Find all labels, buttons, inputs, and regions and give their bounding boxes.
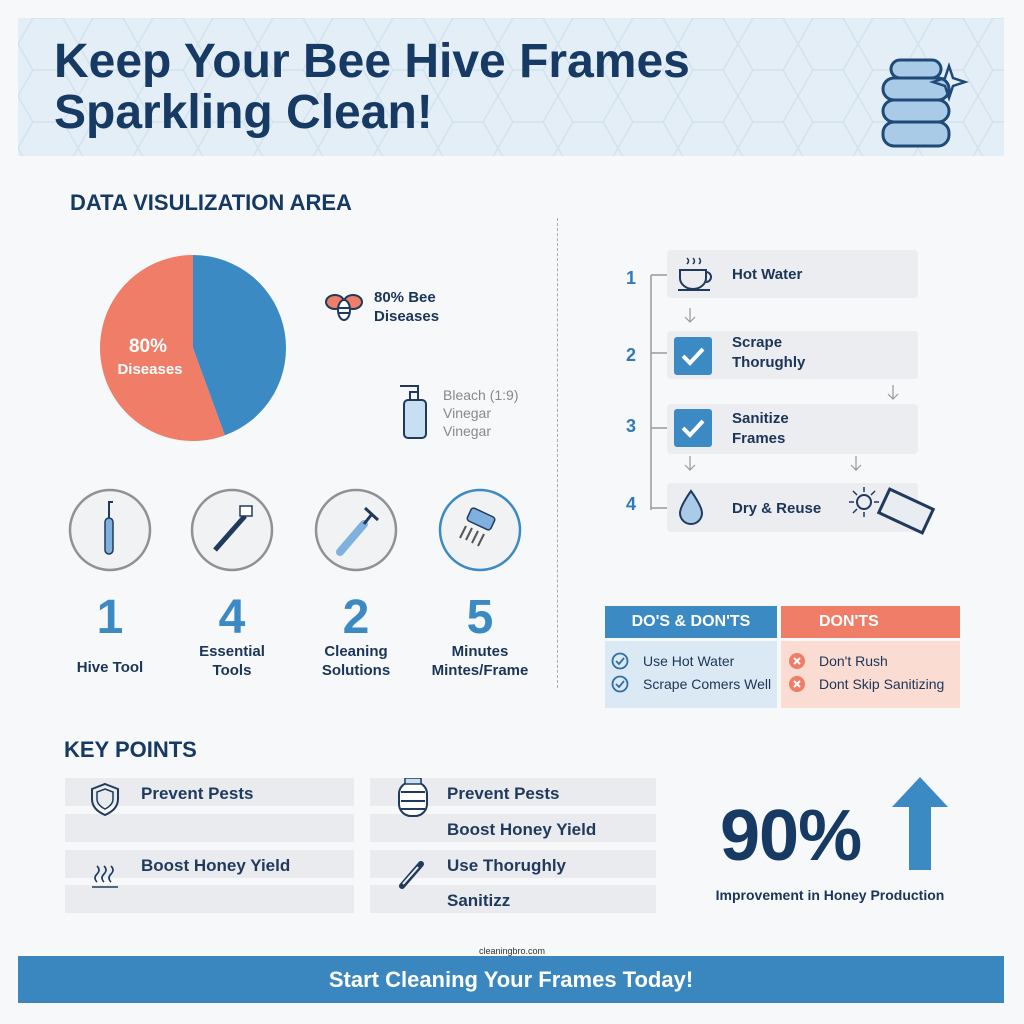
legend: bee diseases: 80% Bee [374, 289, 436, 306]
key points list [65, 778, 656, 913]
process steps: 3 [626, 416, 636, 436]
title [54, 35, 690, 139]
stat icons row: Tools [213, 662, 251, 679]
key points list: Boost Honey Yield [141, 856, 290, 875]
stat icons row: Mintes/Frame [432, 662, 528, 679]
process steps: 4 [626, 494, 636, 514]
header banner [18, 18, 1004, 156]
legend: solutions [400, 385, 518, 439]
stat icons row: Cleaning [324, 643, 388, 660]
key points list: Prevent Pests [141, 784, 253, 803]
icon: hive [882, 58, 969, 148]
stat icons row: 4 [219, 591, 245, 644]
stat: 90% improvement [716, 777, 948, 903]
footer call to action bar: Start Cleaning Your Frames Today! [329, 967, 693, 992]
key points heading: KEY POINTS [64, 737, 197, 762]
stat icons row: 2 [343, 591, 369, 644]
stat: 90% improvement: 90% [720, 796, 861, 876]
do's and don'ts table: DO'S & DON'TS [632, 613, 750, 630]
legend: solutions: Bleach (1:9) [443, 387, 518, 403]
stat icons row: Hive Tool [77, 659, 143, 676]
icon: cup [678, 258, 712, 291]
do's and don'ts table: DON'TS [819, 613, 879, 630]
do's and don'ts table [605, 606, 960, 708]
process steps: Sanitize [732, 410, 789, 427]
key points list: Use Thorughly [447, 856, 566, 875]
do's and don'ts table: Dont Skip Sanitizing [819, 676, 944, 692]
stat icons row: Solutions [322, 662, 390, 679]
pie chart: 80% [129, 336, 167, 357]
key points list: Sanitizz [447, 891, 510, 910]
process steps: 2 [626, 345, 636, 365]
do's and don'ts table: Use Hot Water [643, 653, 734, 669]
stat icons row: 1 [97, 591, 123, 644]
title: Keep Your Bee Hive Frames [54, 35, 690, 88]
legend: solutions: Vinegar [443, 405, 491, 421]
pie chart [100, 255, 286, 441]
footer url: cleaningbro.com [479, 946, 545, 956]
legend: bee diseases: Diseases [374, 308, 439, 325]
do's and don'ts table: Don't Rush [819, 653, 888, 669]
stat icons row: Minutes [452, 643, 508, 660]
section heading: data visualization: DATA VISULIZATION AREA [70, 190, 352, 215]
stat icons row [68, 488, 528, 679]
process steps: Frames [732, 430, 785, 447]
key points list: Prevent Pests [447, 784, 559, 803]
do's and don'ts table: Scrape Comers Well [643, 676, 771, 692]
dashed divider [557, 218, 558, 688]
stat icons row: 5 [467, 591, 493, 644]
footer call to action bar [18, 956, 1004, 1003]
title: Sparkling Clean! [54, 86, 433, 139]
legend: bee diseases [325, 289, 439, 325]
process steps: Hot Water [732, 266, 802, 283]
process steps: 1 [626, 268, 636, 288]
legend: solutions: Vinegar [443, 423, 491, 439]
pie chart: Diseases [117, 361, 183, 378]
process steps: Scrape [732, 334, 782, 351]
process steps: Thorughly [732, 354, 805, 371]
stat icons row: Essential [199, 643, 265, 660]
stat: 90% improvement: Improvement in Honey Production [716, 887, 944, 903]
key points list: Boost Honey Yield [447, 820, 596, 839]
process steps: Dry & Reuse [732, 500, 821, 517]
process steps [626, 250, 936, 535]
